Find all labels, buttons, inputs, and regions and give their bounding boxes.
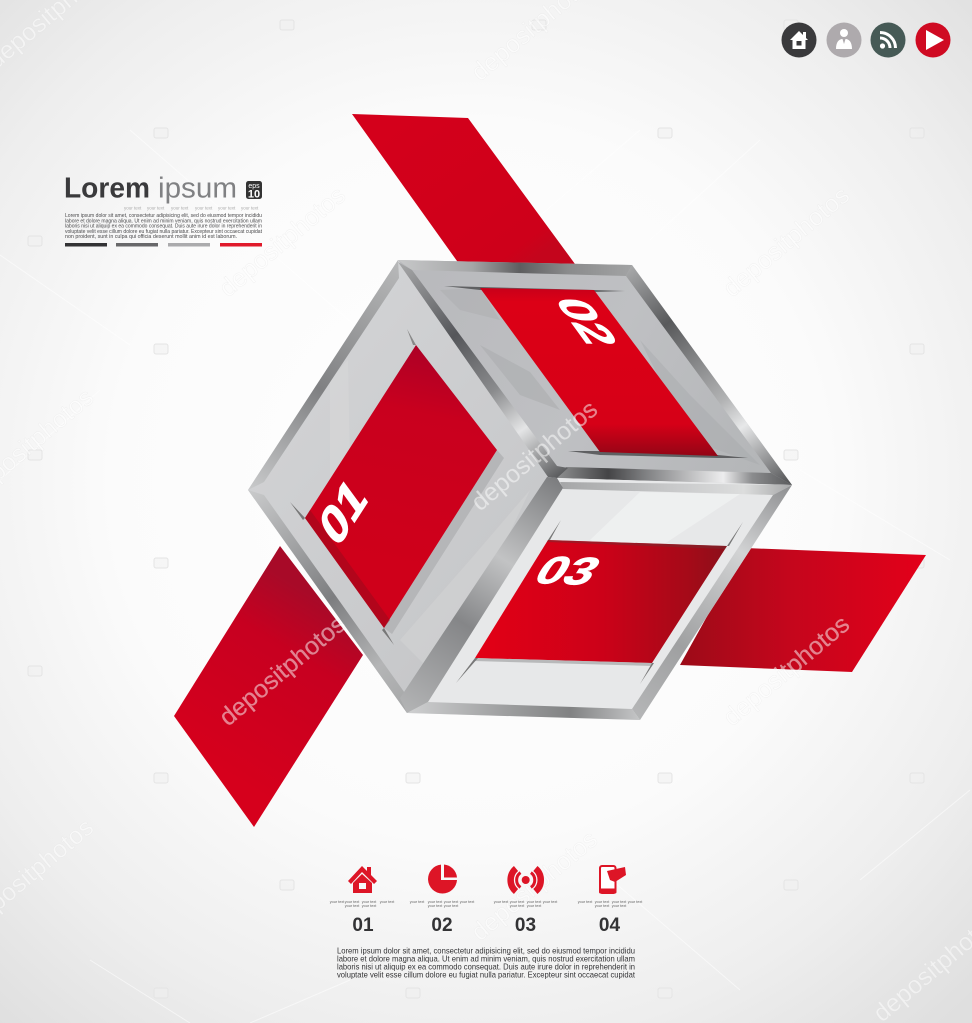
icon: home <box>782 22 816 58</box>
captions: your text <box>578 900 593 904</box>
badge: eps 10: eps <box>248 183 260 190</box>
edge band: top to centre <box>398 262 568 478</box>
watermark text: depositphotos <box>214 181 351 303</box>
icon: signal <box>511 868 541 892</box>
captions: your text <box>444 900 459 904</box>
paragraph: laboris nisi ut aliquip ex ea commodo consequat. Duis aute irure dolor in reprehenderit in <box>337 962 635 972</box>
paragraph: voluptate velit esse cillum dolore eu fugiat nulla pariatur. Excepteur sint occaecat cupidat <box>337 970 636 980</box>
captions: your text <box>362 904 377 908</box>
bottom legend <box>330 864 643 980</box>
icon: play <box>916 22 950 58</box>
badge: eps 10 <box>246 181 262 200</box>
watermark text: depositphotos <box>214 610 351 732</box>
captions: your text <box>345 904 360 908</box>
panel: 02 <box>444 286 748 458</box>
face: top <box>398 260 792 485</box>
captions: your text <box>494 900 509 904</box>
captions: your text <box>612 900 627 904</box>
numbers: 01 <box>352 915 374 936</box>
face: left <box>248 260 557 713</box>
paragraph: Lorem ipsum dolor sit amet, consectetur adipisicing elit, sed do eiusmod tempor incididu <box>337 946 635 956</box>
captions: your text <box>612 904 627 908</box>
paragraph: Lorem ipsum dolor sit amet, consectetur adipisicing elit, sed do eiusmod tempor incididu <box>65 213 262 219</box>
paragraph: labore et dolore magna aliqua. Ut enim ad minim veniam, quis nostrud exercitation ullam <box>337 954 635 964</box>
captions: your text <box>543 900 558 904</box>
numbers: 02 <box>431 915 453 936</box>
captions: your text <box>362 900 377 904</box>
captions: your text <box>460 900 475 904</box>
captions: your text <box>345 900 360 904</box>
numbers: 03 <box>515 915 536 936</box>
captions: your text <box>380 900 395 904</box>
heading: Lorem <box>64 172 150 204</box>
caption row: your text <box>195 206 213 210</box>
number 01: 01 <box>311 466 374 558</box>
paragraph <box>337 946 636 980</box>
icon: rss <box>870 22 906 58</box>
face: right <box>400 477 792 720</box>
ribbon: top <box>352 114 575 268</box>
cube <box>248 260 792 720</box>
title block <box>64 172 263 246</box>
captions <box>330 900 643 908</box>
panel: 01 <box>290 329 504 645</box>
captions: your text <box>628 900 643 904</box>
captions: your text <box>330 900 345 904</box>
caption row: your text <box>124 206 142 210</box>
icon: pie chart <box>428 864 457 894</box>
watermark text: depositphotos <box>466 395 603 517</box>
icon: phone <box>599 866 626 894</box>
captions: your text <box>527 904 542 908</box>
watermark text: depositphotos <box>718 610 855 732</box>
paragraph: voluptate velit esse cillum dolore eu fugiat nulla pariatur. Excepteur sint occaecat cupidat <box>65 229 263 235</box>
captions: your text <box>510 900 525 904</box>
captions: your text <box>595 900 610 904</box>
paragraph <box>65 213 263 240</box>
paragraph: labore et dolore magna aliqua. Ut enim ad minim veniam, quis nostrud exercitation ullam <box>65 218 262 224</box>
heading light: ipsum <box>158 172 237 204</box>
captions: your text <box>444 904 459 908</box>
captions: your text <box>527 900 542 904</box>
captions: your text <box>428 900 443 904</box>
colour bars <box>65 243 262 246</box>
ribbon: right <box>680 548 926 672</box>
captions: your text <box>595 904 610 908</box>
numbers <box>352 915 620 936</box>
caption row: your text <box>241 206 259 210</box>
ribbon: bottom left <box>174 546 363 827</box>
paragraph: non proident, sunt in culpa qui officia deserunt mollit anim id est laborum. <box>65 234 237 240</box>
watermark text: depositphotos <box>718 181 855 303</box>
badge: eps 10: 10 <box>248 188 260 200</box>
icon: house <box>348 866 377 893</box>
number 03: 03 <box>525 549 610 593</box>
panel: 03 <box>456 520 743 684</box>
caption row: your text <box>218 206 236 210</box>
paragraph: laboris nisi ut aliquip ex ea commodo consequat. Duis aute irure dolor in reprehenderit in <box>65 224 262 230</box>
captions: your text <box>510 904 525 908</box>
captions: your text <box>428 904 443 908</box>
caption row: your text <box>147 206 165 210</box>
icon: person <box>826 22 862 58</box>
watermark text: depositphotos <box>466 825 603 947</box>
numbers: 04 <box>599 915 620 936</box>
caption row <box>124 206 259 210</box>
nav icons <box>782 22 950 58</box>
number 02: 02 <box>543 298 629 346</box>
caption row: your text <box>171 206 189 210</box>
captions: your text <box>410 900 425 904</box>
